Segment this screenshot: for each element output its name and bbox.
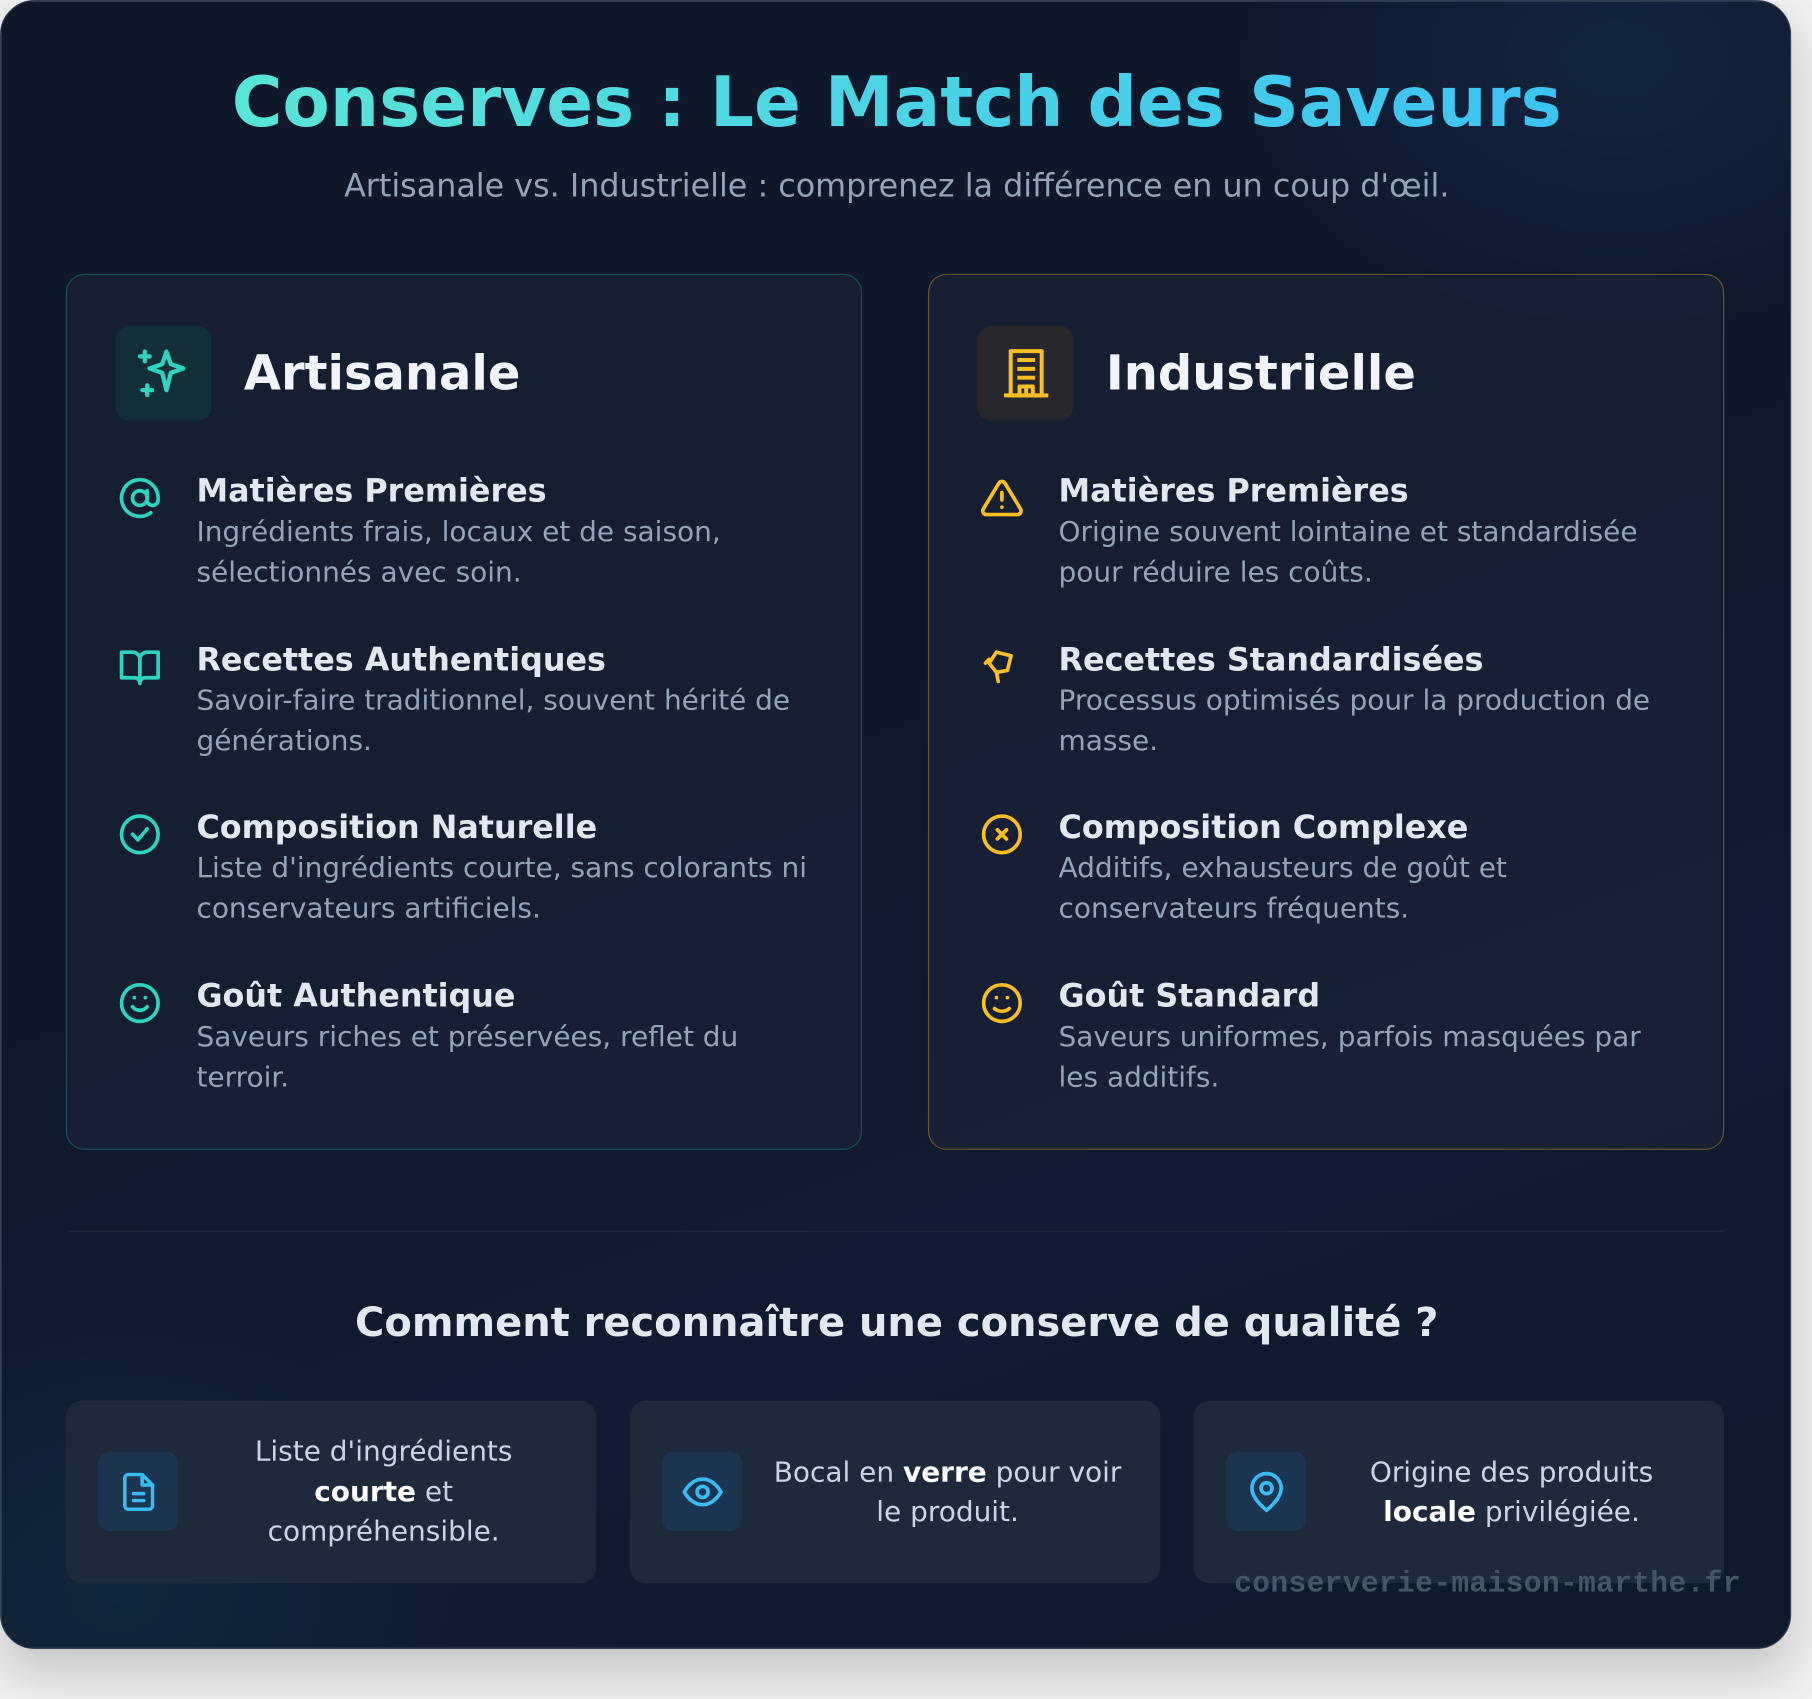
item: goût: les additifs. <box>1059 1060 1219 1093</box>
item: composition: Liste d'ingrédients courte, sans colorants ni <box>196 852 807 884</box>
item: recettes: Recettes Authentiques <box>196 641 606 678</box>
item: composition: conservateurs artificiels. <box>196 892 541 924</box>
tip: glass jar: Bocal en verre pour voir <box>774 1455 1121 1488</box>
item: recettes <box>984 641 1650 756</box>
item: matières premières: Matières Premières <box>1059 473 1409 510</box>
title: Conserves : Le Match des Saveurs <box>232 62 1562 143</box>
tip: ingredients list: compréhensible. <box>268 1515 500 1548</box>
item: composition: conservateurs fréquents. <box>1059 892 1409 924</box>
item: goût: Saveurs uniformes, parfois masquées par <box>1059 1020 1641 1053</box>
tip: ingredients list <box>66 1401 596 1583</box>
watermark: conserverie-maison-marthe.fr <box>1234 1567 1741 1601</box>
item: matières premières: Origine souvent lointaine et standardisée <box>1059 515 1638 548</box>
item: goût: Saveurs riches et préservées, reflet du <box>196 1020 738 1053</box>
item: recettes: Savoir-faire traditionnel, souvent hérité de <box>196 684 790 716</box>
item: composition: Composition Naturelle <box>196 809 597 846</box>
item: recettes: masse. <box>1059 724 1158 756</box>
item: matières premières: Matières Premières <box>196 473 547 510</box>
item: matières premières: Ingrédients frais, locaux et de saison, <box>196 515 721 548</box>
panel: industrielle <box>928 274 1724 1150</box>
item: matières premières: pour réduire les coûts. <box>1059 555 1373 588</box>
item: recettes: générations. <box>196 724 372 756</box>
panel: artisanale <box>66 274 862 1150</box>
icon: document <box>98 1451 178 1531</box>
item: goût: Goût Authentique <box>196 978 515 1015</box>
item: matières premières <box>980 473 1638 588</box>
panel heading: Artisanale <box>244 344 520 401</box>
tip: glass jar <box>630 1401 1160 1583</box>
item: composition: Composition Complexe <box>1059 809 1468 846</box>
icon: sparkles <box>116 326 211 421</box>
tip: ingredients list: courte et <box>314 1475 453 1508</box>
icon: eye <box>662 1451 742 1531</box>
tip: local origin: locale privilégiée. <box>1383 1495 1640 1528</box>
icon: factory <box>978 326 1074 421</box>
section heading: Comment reconnaître une conserve de qualité ? <box>355 1300 1438 1346</box>
tip: glass jar: le produit. <box>876 1495 1019 1528</box>
item: recettes <box>120 641 790 756</box>
item: goût: terroir. <box>196 1060 289 1093</box>
subtitle: Artisanale vs. Industrielle : comprenez la différence en un coup d'œil. <box>344 168 1449 205</box>
title <box>1 59 1792 147</box>
icon: map pin <box>1226 1451 1306 1531</box>
tip: local origin <box>1194 1401 1724 1583</box>
item: recettes: Processus optimisés pour la production de <box>1059 684 1650 716</box>
item: goût <box>120 978 738 1093</box>
item: matières premières: sélectionnés avec soin. <box>196 555 522 588</box>
item: goût <box>982 978 1641 1093</box>
item: composition <box>120 809 807 924</box>
tip: ingredients list: Liste d'ingrédients <box>255 1436 512 1468</box>
tip: local origin: Origine des produits <box>1370 1455 1653 1488</box>
item: composition <box>982 809 1507 924</box>
item: recettes: Recettes Standardisées <box>1059 641 1483 678</box>
panel heading: Industrielle <box>1106 344 1416 401</box>
item: matières premières <box>120 473 721 588</box>
item: goût: Goût Standard <box>1059 978 1320 1015</box>
item: composition: Additifs, exhausteurs de goût et <box>1059 852 1507 884</box>
